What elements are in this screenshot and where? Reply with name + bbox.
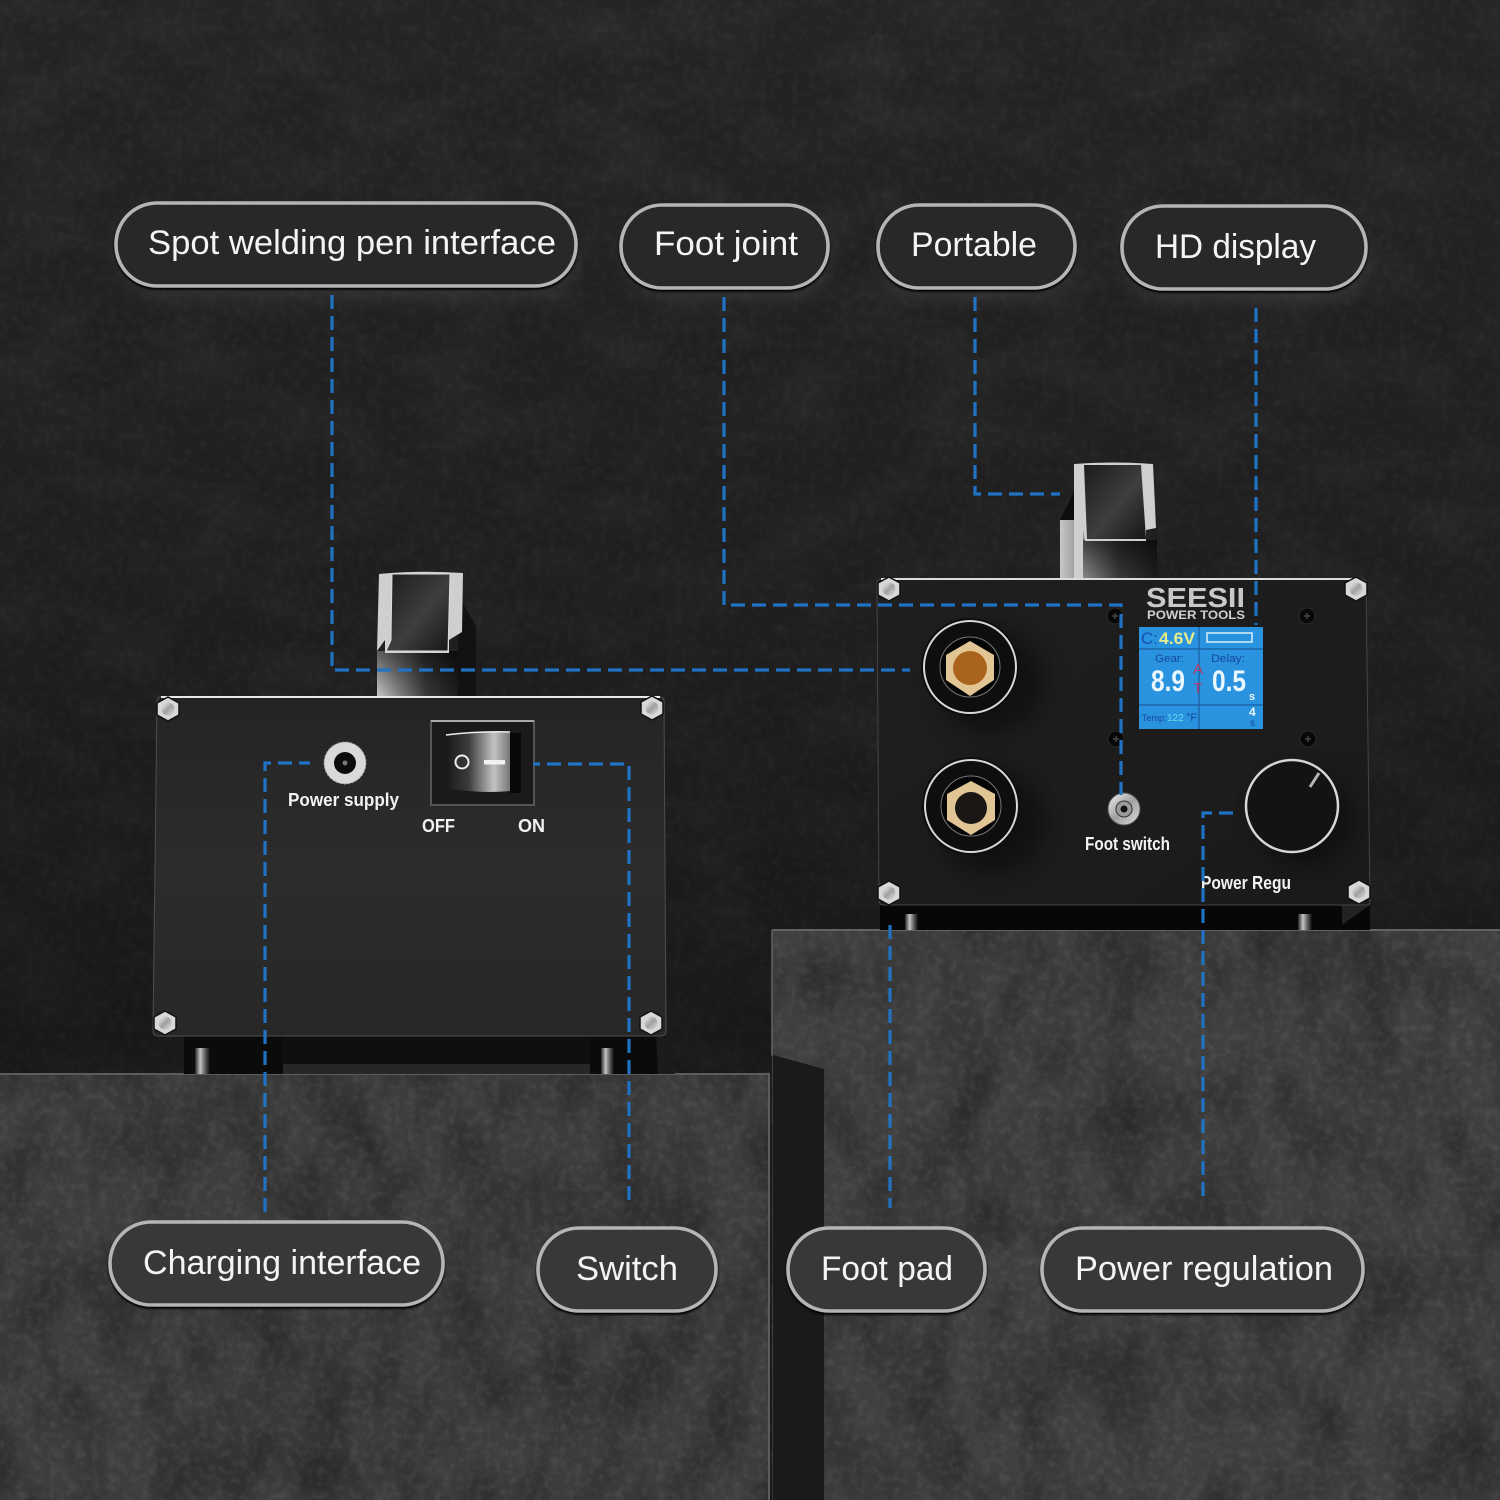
folded carry handle, front view [1060,462,1157,579]
connector shadows [936,626,1353,874]
rubber feet [880,905,1370,930]
leader: foot joint [724,297,1121,795]
label: foot joint: Foot joint [654,225,799,263]
leader: charging interface [265,763,310,1212]
LCD display: 4 [1249,705,1256,719]
LCD display: T [1193,680,1203,697]
on label: ON [518,816,545,836]
LCD display: 0.5 [1212,665,1246,698]
label: portable [878,205,1075,288]
LCD display: Temp: [1142,713,1167,723]
lower welding pen socket [922,757,1020,855]
leader: spot welding pen interface [332,295,910,670]
LCD display: °F [1186,712,1197,724]
top edge highlight [161,696,660,698]
brand logo: POWER TOOLS [1147,610,1245,622]
panel screws [878,577,1370,905]
rubber feet [184,1034,675,1074]
label: foot pad [788,1228,985,1311]
LCD display: 4.6V [1159,629,1196,648]
leader: portable [975,297,1060,494]
label: power regulation: Power regulation [1075,1250,1333,1288]
label: switch [538,1228,716,1311]
label: charging interface: Charging interface [143,1244,421,1282]
foot switch label: Foot switch [1085,834,1170,854]
dashed leader lines [265,295,1256,1212]
product: front of spot welder [877,462,1370,930]
power regulation label: Power Regu [1201,873,1291,893]
top edge highlight [881,578,1356,580]
label: power regulation [1042,1228,1363,1311]
label: HD display [1122,206,1366,289]
soft glow behind top labels [120,215,1367,301]
LCD display: Delay: [1211,653,1245,665]
LCD display: C: [1141,629,1158,648]
LCD display: 122 [1167,713,1184,724]
front panel [877,579,1370,905]
leader: switch [533,764,629,1200]
product: rear of spot welder [153,572,675,1074]
label: spot welding pen interface [116,203,576,286]
LCD display [1139,627,1263,729]
label: charging interface [110,1222,443,1305]
label: foot joint [621,205,828,288]
folded carry handle, rear view [377,572,476,697]
off label: OFF [422,816,455,836]
brand logo: SEESII [1146,582,1245,613]
power regulation knob [1246,760,1338,852]
LCD display: 8.9 [1151,665,1185,698]
label: spot welding pen interface: Spot welding pen interface [148,224,556,262]
concrete block: right pedestal [772,930,1500,1500]
label: portable: Portable [911,226,1037,264]
LCD display: s [1249,691,1255,703]
upper welding pen socket [921,618,1019,716]
concrete block: left pedestal [0,1074,770,1500]
leader: power regulation [1203,813,1236,1196]
rear panel [153,697,666,1036]
rocker switch [431,721,534,805]
LCD display: A [1193,661,1203,678]
power supply label: Power supply [288,790,399,810]
leader: HD display [1254,308,1258,625]
panel screws [154,696,663,1035]
foot switch port [1108,793,1140,825]
power supply jack [324,742,366,784]
LCD display: s [1250,718,1255,729]
leader: foot pad [888,925,892,1208]
label: HD display: HD display [1155,228,1316,266]
label: switch: Switch [576,1250,678,1288]
LCD display: Gear: [1155,653,1184,665]
label: foot pad: Foot pad [821,1250,953,1288]
